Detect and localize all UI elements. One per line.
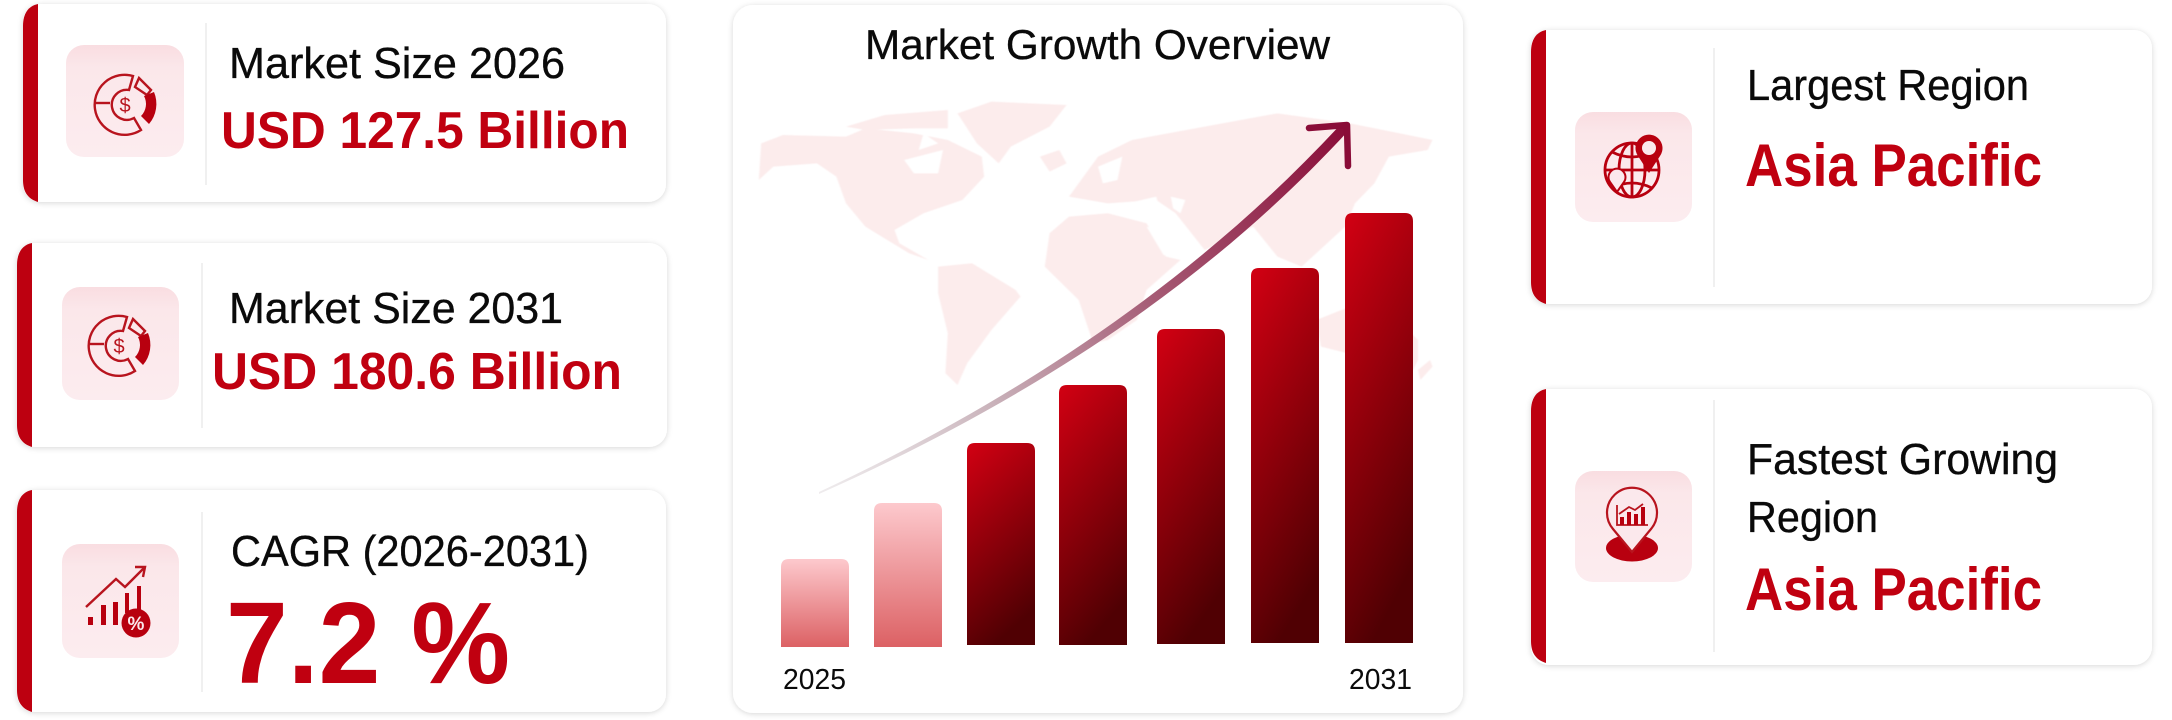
label: market size 2026: Market Size 2026 xyxy=(229,39,565,88)
panel: market size 2026 xyxy=(23,4,666,202)
icon: location pin with chart xyxy=(1575,471,1692,582)
value: Asia Pacific: Asia Pacific xyxy=(1745,132,2042,199)
icon: growth chart with percent badge: % xyxy=(128,614,145,635)
label: fastest growing region: Region xyxy=(1747,493,1878,542)
world map background xyxy=(759,102,1433,385)
panel: largest region xyxy=(1531,30,2152,304)
value: USD 127.5 Billion: USD 127.5 Billion xyxy=(221,102,629,160)
panel: market size 2031 xyxy=(17,243,667,447)
growth arrow xyxy=(819,123,1349,494)
panel: fastest growing region xyxy=(1531,389,2152,665)
value: USD 180.6 Billion: USD 180.6 Billion xyxy=(212,343,622,401)
panel: CAGR xyxy=(17,490,666,712)
bar chart xyxy=(781,213,1413,647)
icon: globe with location pins xyxy=(1575,112,1692,222)
label: largest region: Largest Region xyxy=(1747,61,2029,110)
icon: dollar donut chart xyxy=(66,45,184,157)
heading: market growth overview: Market Growth Overview xyxy=(865,21,1331,68)
panel: market growth overview xyxy=(733,5,1463,713)
value: Asia Pacific: Asia Pacific xyxy=(1745,556,2042,623)
axis label: 2025: 2025 xyxy=(783,664,846,696)
label: fastest growing region: Fastest Growing xyxy=(1747,435,2058,484)
label: CAGR 2026-2031: CAGR (2026-2031) xyxy=(231,527,589,576)
axis label: 2031: 2031 xyxy=(1349,664,1412,696)
label: fastest growing region xyxy=(1747,435,2058,542)
icon: dollar donut chart xyxy=(62,287,179,400)
label: market size 2031: Market Size 2031 xyxy=(229,284,563,333)
icon: dollar donut chart: $ xyxy=(119,95,131,117)
value: 7.2 %: 7.2 % xyxy=(226,578,510,708)
icon: growth chart with percent badge xyxy=(62,544,179,658)
icon: dollar donut chart: $ xyxy=(113,336,125,358)
